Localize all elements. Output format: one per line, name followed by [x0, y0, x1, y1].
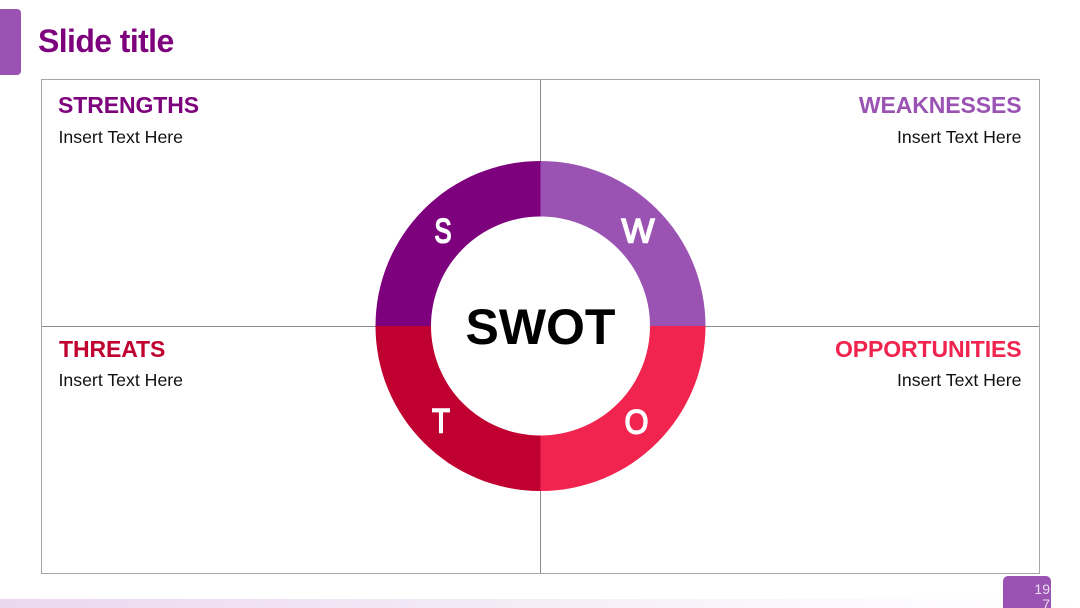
panel: threats	[58, 336, 183, 390]
text: strengths: Insert Text Here	[58, 127, 183, 147]
ring letter S: S	[434, 212, 452, 250]
ring segment: opportunities	[540, 326, 706, 491]
ring segment: strengths	[376, 161, 540, 326]
panel: opportunities	[835, 336, 1022, 390]
ring letter O: O	[624, 404, 648, 442]
panel: weaknesses	[858, 92, 1022, 147]
title: Slide title	[38, 23, 174, 59]
heading: strengths: STRENGTHS	[58, 92, 199, 118]
footer gradient band	[0, 599, 1080, 608]
ring letter W: W	[622, 212, 654, 250]
heading: opportunities: OPPORTUNITIES	[835, 336, 1022, 362]
page number badge	[1003, 576, 1051, 608]
ring segment: threats	[376, 326, 540, 491]
center disc	[430, 216, 650, 436]
heading: weaknesses: WEAKNESSES	[859, 92, 1022, 118]
title accent tab	[0, 9, 21, 75]
heading: threats: THREATS	[59, 336, 165, 362]
text: opportunities: Insert Text Here	[897, 370, 1022, 390]
panel: strengths	[58, 92, 199, 147]
center label: SWOT	[466, 299, 615, 355]
text: threats: Insert Text Here	[58, 370, 183, 390]
ring letter T: T	[432, 402, 450, 440]
text: weaknesses: Insert Text Here	[897, 127, 1022, 147]
ring segment: weaknesses	[540, 161, 706, 326]
